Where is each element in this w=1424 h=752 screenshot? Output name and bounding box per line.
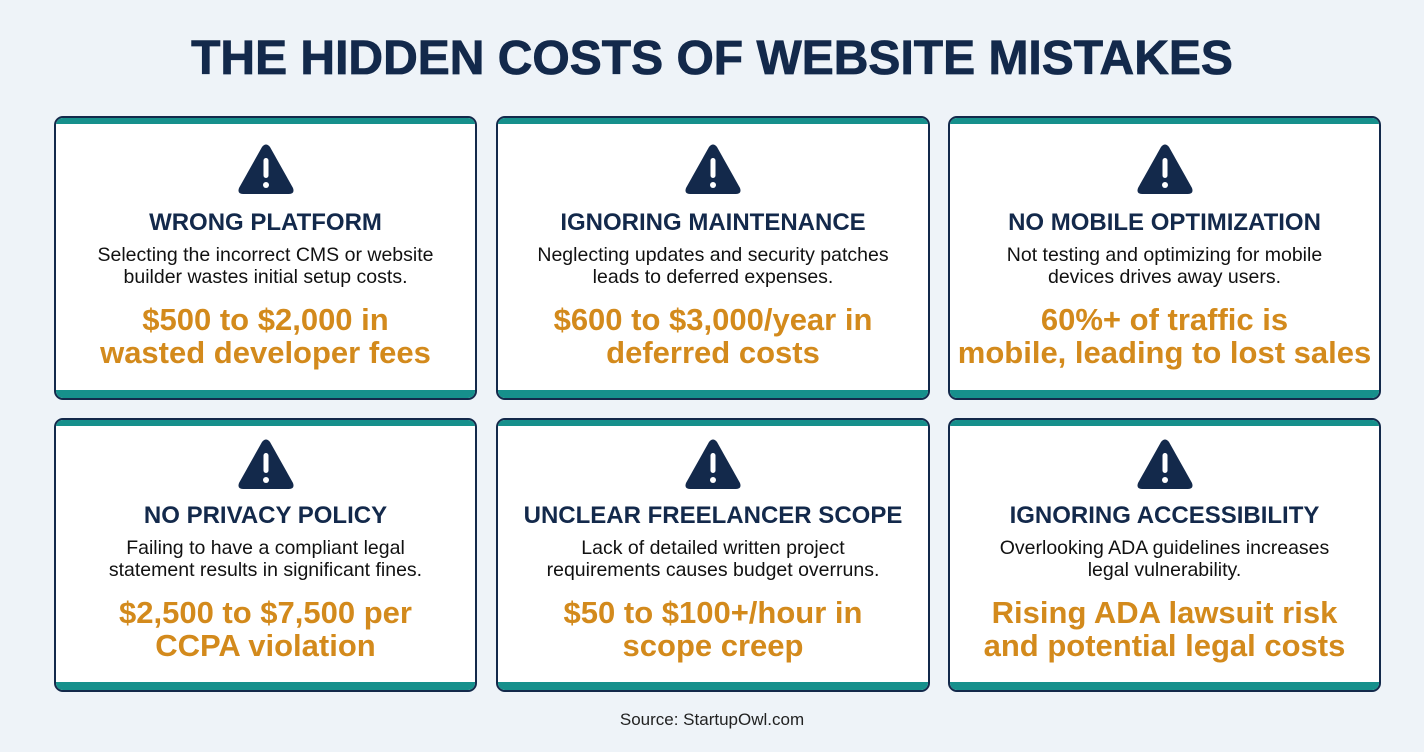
heading: UNCLEAR FREELANCER SCOPE (524, 502, 902, 529)
icon: warning (686, 144, 740, 194)
description: devices drives away users. (1048, 266, 1281, 288)
source note: Source: StartupOwl.com (620, 710, 804, 729)
cost (564, 595, 862, 663)
heading: IGNORING ACCESSIBILITY (1010, 502, 1319, 529)
heading: WRONG PLATFORM (149, 209, 382, 236)
icon: warning (238, 440, 294, 489)
panel: ignoring maintenance (496, 116, 930, 400)
cost: CCPA violation (155, 628, 376, 663)
description: Overlooking ADA guidelines increases (1000, 537, 1329, 559)
icon: warning (686, 440, 740, 489)
cost: Rising ADA lawsuit risk (992, 595, 1337, 630)
icon: warning (1138, 440, 1192, 489)
cost: $600 to $3,000/year in (554, 302, 872, 337)
heading: IGNORING MAINTENANCE (560, 209, 866, 236)
description: statement results in significant fines. (109, 559, 422, 581)
cost: deferred costs (606, 335, 820, 370)
panel: wrong platform (54, 116, 477, 400)
description (1007, 244, 1322, 288)
description: requirements causes budget overruns. (547, 559, 879, 581)
heading: NO PRIVACY POLICY (144, 502, 387, 529)
panel: unclear freelancer scope (496, 418, 930, 692)
cost: 60%+ of traffic is (1041, 302, 1288, 337)
panel: no privacy policy (54, 418, 477, 692)
cost: scope creep (623, 628, 803, 663)
cost (984, 595, 1345, 663)
description (98, 244, 433, 288)
cost: $2,500 to $7,500 per (119, 595, 412, 630)
cost: $500 to $2,000 in (142, 302, 389, 337)
cost (958, 302, 1371, 370)
description (537, 244, 889, 288)
description (109, 537, 422, 581)
title: THE HIDDEN COSTS OF WEBSITE MISTAKES (191, 32, 1233, 85)
cost (119, 595, 412, 663)
panel: ignoring accessibility (948, 418, 1381, 692)
description (1000, 537, 1329, 581)
cost: wasted developer fees (100, 335, 431, 370)
cost: and potential legal costs (984, 628, 1345, 663)
icon: warning (238, 144, 294, 194)
cost (554, 302, 872, 370)
heading: NO MOBILE OPTIMIZATION (1008, 209, 1321, 236)
description: Failing to have a compliant legal (126, 537, 405, 559)
panel: no mobile optimization (948, 116, 1381, 400)
icon: warning (1138, 144, 1192, 194)
description: Not testing and optimizing for mobile (1007, 244, 1322, 266)
description (547, 537, 879, 581)
cost (100, 302, 431, 370)
description: Neglecting updates and security patches (537, 244, 889, 266)
cost: mobile, leading to lost sales (958, 335, 1371, 370)
description: Selecting the incorrect CMS or website (98, 244, 433, 266)
cost: $50 to $100+/hour in (564, 595, 862, 630)
description: legal vulnerability. (1088, 559, 1241, 581)
description: leads to deferred expenses. (593, 266, 833, 288)
description: Lack of detailed written project (581, 537, 845, 559)
description: builder wastes initial setup costs. (124, 266, 407, 288)
